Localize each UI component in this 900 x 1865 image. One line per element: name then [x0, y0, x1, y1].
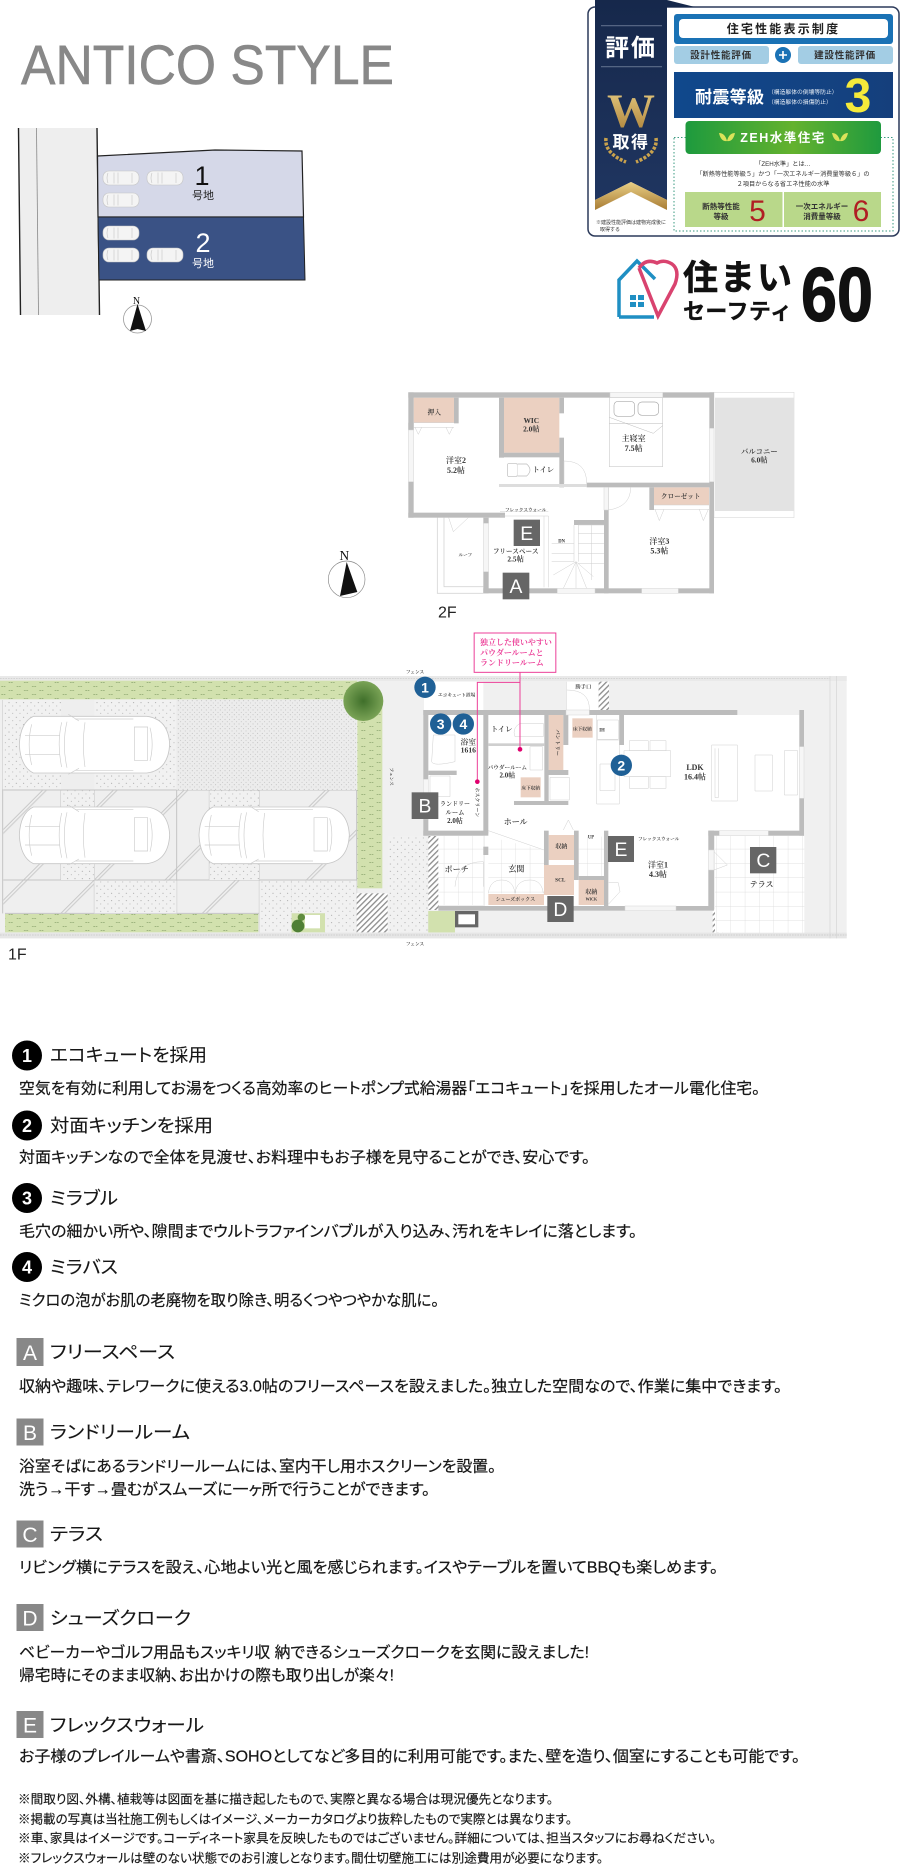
section A: A: [23, 1342, 37, 1365]
grade 6 box: 6: [853, 195, 869, 228]
room labels 1F: エコキュート置場: [438, 692, 476, 699]
section D: 帰宅時にそのまま収納、お出かけの際も取り出しが楽々!: [19, 1666, 394, 1684]
planter: [292, 913, 325, 932]
callout: [474, 633, 556, 784]
feature 4: 4: [22, 1258, 32, 1278]
label D: D: [553, 900, 567, 921]
roof: [437, 518, 483, 593]
meter box: [428, 911, 478, 932]
feature 4: ミラバス: [50, 1258, 118, 1278]
1F floor plan: [0, 633, 847, 963]
logo subtext: セーフティ: [683, 299, 792, 324]
room labels 1F: テラス: [750, 880, 774, 889]
site map: [18, 128, 305, 333]
ground: [0, 676, 847, 938]
feature 2: 対面キッチンを採用: [50, 1116, 213, 1136]
grade 5 box: 断熱等性能: [702, 201, 740, 211]
callout: ランドリールーム: [480, 658, 544, 667]
section C: [16, 1520, 718, 1576]
system title bar: 住宅性能表示制度: [727, 21, 840, 36]
fixtures and furniture: [430, 682, 798, 904]
callout: パウダールームと: [480, 647, 544, 657]
room labels 1F: 玄関: [508, 863, 524, 873]
label B: B: [419, 797, 431, 818]
room labels 1F: IH: [599, 729, 605, 734]
ZEH explanation: 「ZEH水準」とは…: [755, 160, 811, 168]
feature 4: ミクロの泡がお肌の老廃物を取り除き、明るくつやつやかな肌に。: [19, 1292, 439, 1310]
ribbon note: ※建設性能評価は建物完成後に: [596, 219, 666, 226]
label C: [750, 847, 776, 873]
roof: ルーフ: [458, 552, 473, 558]
section D: ベビーカーやゴルフ用品もスッキリ収 納できるシューズクロークを玄関に設えました!: [19, 1642, 589, 1662]
section B: 浴室そばにあるランドリールームには、室内干し用ホスクリーンを設置。: [19, 1458, 496, 1476]
room labels 1F: フェンス: [406, 941, 424, 947]
room labels 1F: UP: [588, 835, 594, 840]
numbered marker 3: [430, 713, 451, 735]
room labels 1F: ランドリー: [440, 801, 470, 808]
pink rooms: [488, 715, 604, 905]
room labels 2F: フレックスウォール: [505, 506, 547, 513]
section D: シューズクローク: [50, 1608, 191, 1628]
room labels 1F: WICK: [586, 897, 598, 902]
feature 2: 2: [22, 1116, 32, 1136]
ZEH explanation: ２項目からなる省エネ性能の水準: [737, 180, 829, 188]
lot 1: [98, 150, 304, 217]
room labels 2F: DN: [558, 540, 566, 545]
ZEH banner: ZEH水準住宅: [740, 130, 826, 145]
room labels 1F: LDK: [686, 763, 704, 772]
balcony: 6.0帖: [751, 456, 768, 465]
room labels 1F: 2.0帖: [499, 771, 515, 780]
title: ANTICO STYLE: [21, 33, 394, 96]
room labels 2F: 主寝室: [622, 433, 646, 443]
room labels 1F: SCL: [555, 877, 566, 883]
feature 4: [12, 1252, 439, 1310]
numbered marker 1: [414, 677, 436, 698]
label A: [503, 573, 529, 599]
north arrow: N: [133, 296, 140, 307]
feature 1: [12, 1040, 760, 1098]
grade 6 box: 消費量等級: [803, 211, 841, 221]
grade 5 box: 等級: [714, 211, 729, 221]
section E: [16, 1711, 800, 1766]
closet doors: [415, 427, 708, 521]
feature 1: 空気を有効に利用してお湯をつくる高効率のヒートポンプ式給湯器「エコキュート」を採用したオール電化住宅。: [19, 1080, 760, 1098]
room labels 1F: ルーム: [446, 809, 464, 817]
ribbon note: [596, 219, 666, 233]
windows 2F: [408, 392, 714, 593]
windows 1F: [423, 710, 804, 911]
ZEH explanation: [696, 160, 870, 188]
footnotes: ※間取り図、外構、植栽等は図面を基に描き起したもので、実際と異なる場合は現況優先となります。: [18, 1792, 553, 1806]
numbered marker 4: 4: [459, 716, 467, 732]
section C: テラス: [50, 1524, 103, 1544]
fittings: [414, 423, 709, 587]
section A: [16, 1338, 782, 1396]
room labels 1F: トイレ: [491, 724, 512, 733]
numbered marker 1: 1: [421, 679, 429, 695]
section D: [16, 1604, 589, 1684]
room labels 2F: 5.3帖: [650, 546, 668, 556]
toilet fixture: [507, 463, 530, 477]
label D: [547, 896, 574, 922]
room labels 1F: 4.3帖: [649, 869, 667, 879]
grade 6 box: 一次エネルギー: [796, 201, 848, 211]
stairs: [552, 525, 604, 588]
label E: E: [520, 524, 533, 545]
car 3: [199, 805, 349, 865]
parking slabs: [3, 700, 357, 932]
room labels 1F: 床下収納: [573, 725, 592, 732]
ribbon: [595, 0, 695, 210]
logo text: 住まい: [683, 259, 792, 298]
ribbon: 評価: [605, 35, 657, 62]
section E: フレックスウォール: [50, 1716, 204, 1736]
lot 1: 号地: [192, 189, 214, 202]
numbered marker 4: [453, 713, 474, 735]
house floor: [424, 682, 804, 933]
section C: C: [22, 1524, 38, 1547]
logo: sumai safety 60: [619, 253, 873, 338]
room labels 1F: [388, 670, 774, 947]
walls 1F: [423, 710, 804, 911]
section E: E: [23, 1714, 37, 1738]
label B: [412, 792, 438, 819]
room labels 2F: [428, 407, 700, 564]
bed and pillows: [609, 398, 663, 467]
room labels 2F: 押入: [428, 407, 441, 416]
balcony: [714, 392, 794, 518]
section B: [16, 1418, 496, 1498]
room labels 1F: フェンス: [406, 670, 424, 676]
ZEH banner: [686, 121, 881, 154]
performance badge: [588, 0, 899, 236]
feature 3: [12, 1183, 637, 1240]
ribbon note: 取得する: [600, 226, 620, 233]
gravel areas: [3, 700, 428, 933]
evaluation pills: [674, 46, 893, 64]
feature 2: [12, 1110, 590, 1166]
section B: B: [23, 1422, 37, 1445]
section C: リビング横にテラスを設え、心地よい光と風を感じられます。イスやテーブルを置いてBBQも楽しめます。: [19, 1558, 718, 1576]
room labels 1F: フレックスウォール: [638, 835, 680, 842]
room labels 2F: トイレ: [533, 465, 554, 474]
hatched areas: [357, 682, 723, 933]
evaluation pills: 建設性能評価: [814, 50, 876, 62]
room labels 1F: ホスクリーン: [473, 787, 479, 817]
logo icon: [619, 261, 677, 317]
room labels 1F: パントリー: [554, 729, 561, 756]
feature 1: エコキュートを採用: [50, 1046, 207, 1066]
section A: 収納や趣味、テレワークに使える3.0帖のフリースペースを設えました。独立した空間なので、作業に集中できます。: [19, 1378, 782, 1396]
dotted frame: [674, 138, 893, 231]
section A: フリースペース: [50, 1342, 175, 1362]
numbered marker 2: [611, 755, 632, 776]
lot 2: [98, 217, 305, 280]
label E: [608, 836, 634, 862]
ZEH explanation: 「断熱等性能等級５」かつ「一次エネルギー消費量等級６」の: [696, 170, 870, 178]
room labels 2F: 5.2帖: [447, 465, 465, 475]
label E: E: [615, 840, 628, 861]
room labels 1F: 勝手口: [575, 683, 591, 691]
footnotes: ※掲載の写真は当社施工例もしくはイメージ、メーカーカタログより抜粋したもので実際とは異なります。: [18, 1812, 572, 1826]
room labels 1F: 収納: [555, 843, 567, 851]
grade 5 box: [685, 192, 782, 228]
walls: [408, 392, 714, 593]
feature 3: 毛穴の細かい所や、隙間までウルトラファインバブルが入り込み、汚れをキレイに落とします。: [19, 1222, 637, 1240]
seismic grade: 耐震等級: [695, 87, 764, 107]
1F label: 1F: [8, 946, 27, 963]
label E: [514, 520, 540, 546]
lot 2: 2: [195, 228, 211, 258]
2F label: 2F: [438, 605, 457, 622]
grade 6 box: [784, 192, 881, 228]
feature 3: 3: [22, 1188, 32, 1208]
system title bar: [674, 14, 893, 44]
section B: 洗う→干す→畳むがスムーズに一ヶ所で行うことができます。: [19, 1480, 430, 1498]
footnotes: [18, 1792, 716, 1865]
lot 1: 1: [194, 161, 210, 191]
room labels 1F: 16.4帖: [684, 772, 706, 782]
logo number: 60: [801, 253, 873, 338]
footnotes: ※車、家具はイメージです。コーディネート家具を反映したものではございません。詳細については、担当スタッフにお尋ねください。: [18, 1830, 716, 1846]
2F floor plan: [328, 392, 794, 622]
room labels 1F: パウダールーム: [488, 764, 527, 772]
room labels 1F: 収納: [585, 888, 597, 896]
numbered marker 2: 2: [617, 757, 625, 773]
feature 2: 対面キッチンなので全体を見渡せ、お料理中もお子様を見守ることができ、安心です。: [19, 1148, 590, 1166]
room labels 1F: 浴室: [461, 737, 476, 747]
north arrow: [328, 548, 365, 598]
seismic grade: （構造躯体の損傷防止）: [768, 98, 832, 106]
label C: C: [756, 851, 770, 872]
room labels 1F: シューズボックス: [496, 896, 535, 903]
seismic grade: [674, 70, 893, 123]
ribbon: W: [607, 85, 655, 138]
room labels 2F: 洋室2: [446, 455, 466, 465]
tree: [343, 681, 383, 721]
section B: ランドリールーム: [50, 1422, 190, 1442]
room labels 2F: 2.0帖: [523, 425, 540, 434]
evaluation pills: 設計性能評価: [690, 50, 752, 62]
numbered marker 3: 3: [437, 716, 445, 732]
grade 5 box: 5: [749, 195, 766, 228]
section E: お子様のプレイルームや書斎、SOHOとしてなど多目的に利用可能です。また、壁を造り、個室にすることも可能です。: [19, 1748, 800, 1766]
seismic grade: 3: [845, 70, 871, 123]
car 2: [19, 805, 170, 865]
north arrow: [124, 296, 152, 333]
feature 3: ミラブル: [50, 1188, 118, 1208]
room labels 1F: 2.0帖: [447, 816, 463, 825]
room labels 2F: 2.5帖: [507, 555, 525, 564]
room labels 2F: フリースペース: [493, 547, 539, 555]
car 1: [19, 714, 170, 774]
lot 2: 号地: [192, 257, 214, 270]
feature 1: 1: [22, 1046, 32, 1066]
room labels 1F: 1616: [461, 746, 476, 755]
rooms in pink: [414, 398, 709, 505]
ribbon: 取得: [612, 133, 650, 152]
room labels 1F: フェンス: [388, 768, 394, 786]
section D: D: [22, 1608, 38, 1630]
seismic grade: （構造躯体の倒壊等防止）: [768, 88, 838, 96]
room labels 2F: 洋室3: [649, 536, 669, 546]
callout: 独立した使いやすい: [480, 637, 552, 647]
north arrow: N: [340, 548, 350, 563]
road: [18, 128, 100, 315]
fences: [0, 676, 847, 938]
room labels 2F: WIC: [524, 416, 539, 425]
label A: A: [510, 577, 523, 598]
balcony: バルコニー: [741, 447, 778, 456]
room labels 1F: ポーチ: [445, 865, 469, 874]
room labels 2F: クローゼット: [661, 492, 700, 500]
frame: [588, 7, 899, 236]
room labels 1F: ホール: [504, 817, 528, 826]
grass strips: [0, 681, 455, 932]
room labels 1F: 床下収納: [521, 784, 540, 791]
room labels 1F: 洋室1: [648, 859, 668, 869]
room labels 2F: 7.5帖: [625, 443, 643, 453]
